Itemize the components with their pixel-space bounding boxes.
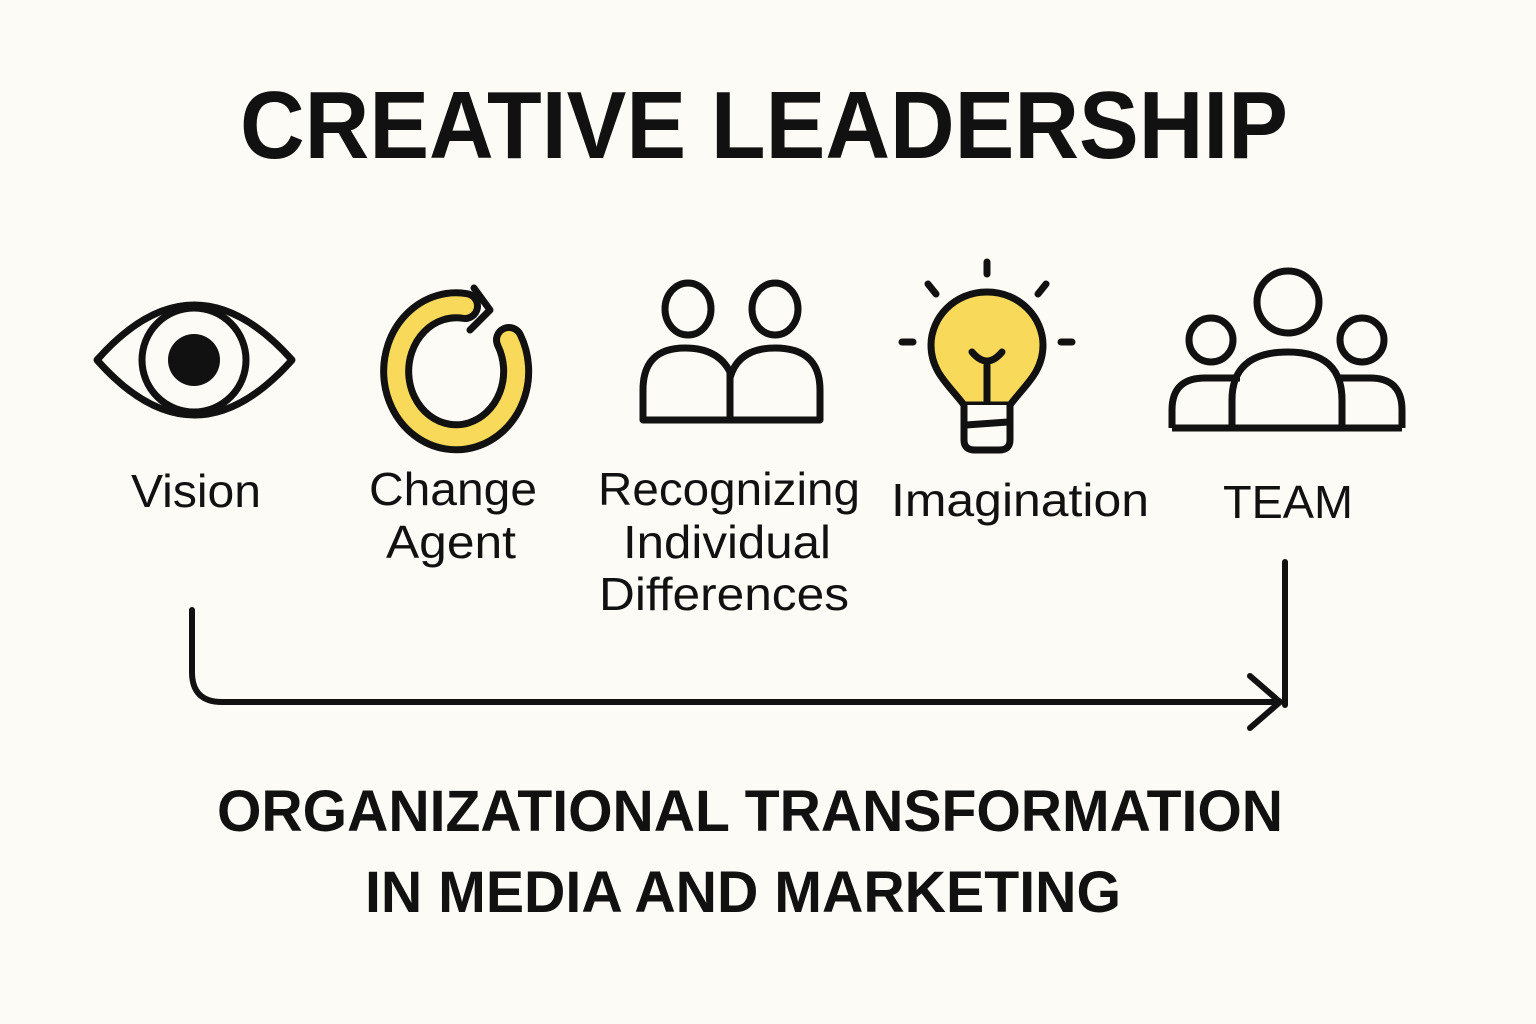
label: Imagination: Imagination bbox=[891, 474, 1149, 526]
bottom heading: ORGANIZATIONAL TRANSFORMATION bbox=[217, 779, 1283, 844]
icon: light bulb bbox=[902, 262, 1072, 450]
title: CREATIVE LEADERSHIP bbox=[240, 72, 1288, 179]
arrow bbox=[192, 562, 1285, 728]
label: Vision: Vision bbox=[131, 465, 261, 517]
label: Change Agent: Change bbox=[369, 463, 537, 515]
icon: team bbox=[1172, 271, 1402, 428]
bottom heading bbox=[217, 779, 1283, 925]
label: TEAM: TEAM bbox=[1223, 476, 1353, 528]
label: Recognizing Individual Differences bbox=[598, 463, 860, 620]
bottom heading: IN MEDIA AND MARKETING bbox=[365, 860, 1121, 925]
icon: change arrow bbox=[396, 288, 516, 437]
icon: two people bbox=[643, 283, 820, 420]
icon: eye bbox=[97, 305, 292, 415]
label: Change Agent: Agent bbox=[386, 516, 516, 568]
label: Recognizing Individual Differences: Recognizing bbox=[598, 463, 860, 515]
label: Change Agent bbox=[369, 463, 537, 568]
label: Recognizing Individual Differences: Individual bbox=[623, 516, 831, 568]
label: Recognizing Individual Differences: Differences bbox=[599, 568, 849, 620]
